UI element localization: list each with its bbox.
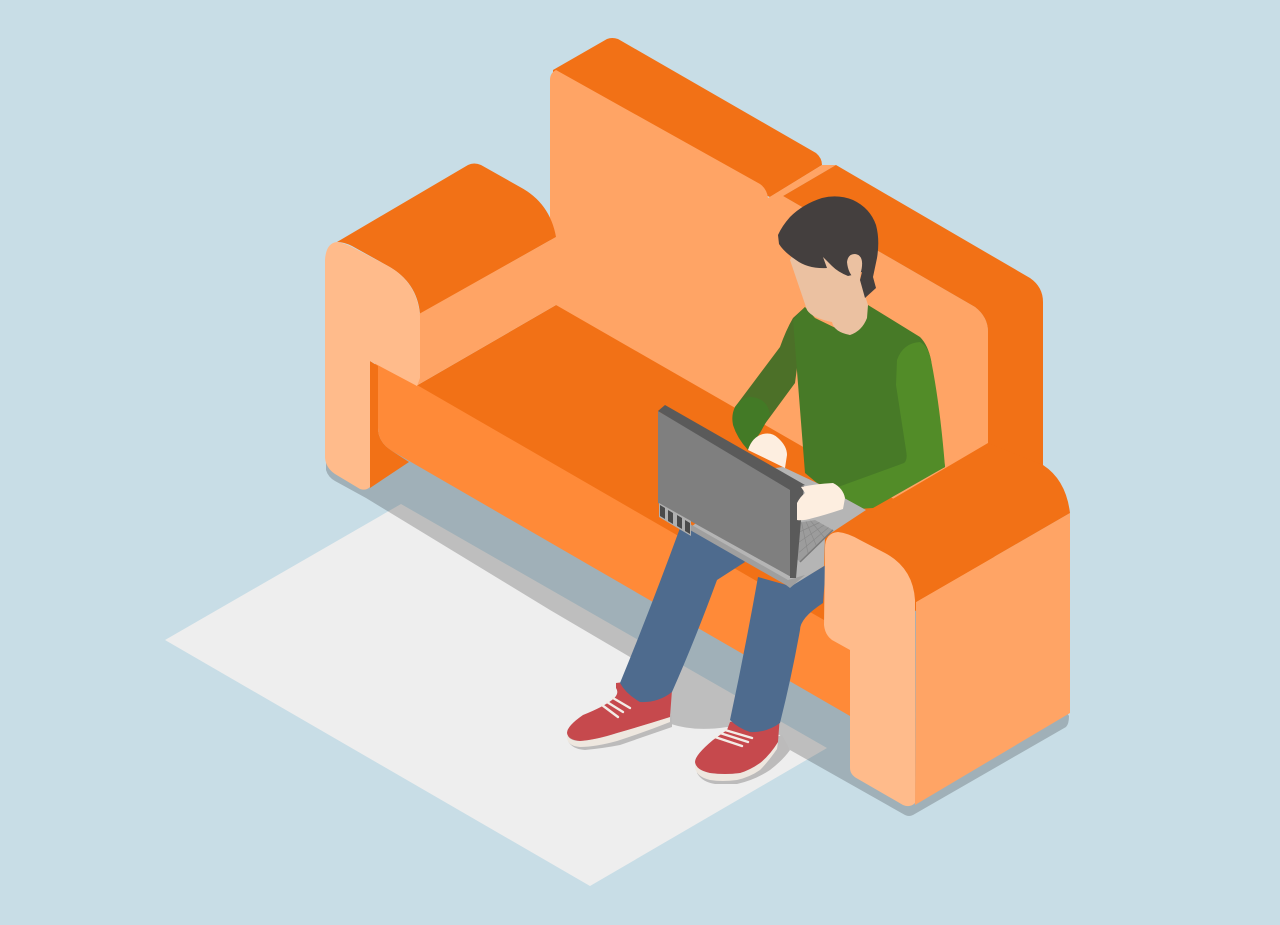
shoe shadows	[568, 715, 790, 784]
left leg	[620, 528, 745, 702]
left arm: top	[337, 164, 556, 314]
left shoe	[567, 680, 672, 747]
right arm: outer side	[915, 513, 1070, 805]
torso	[793, 305, 945, 505]
ear	[847, 254, 862, 280]
near hand	[797, 483, 845, 520]
back upper arm	[733, 307, 805, 448]
back hand	[748, 434, 787, 468]
person	[567, 196, 945, 781]
right arm: front	[824, 532, 915, 806]
rug	[165, 504, 827, 886]
laptop base	[690, 467, 866, 588]
near arm	[838, 342, 945, 510]
left arm: shaded underside	[370, 361, 409, 488]
keyboard	[795, 520, 833, 562]
right shoe	[695, 715, 780, 781]
sofa and person floor shadow	[326, 440, 1069, 816]
head	[790, 240, 868, 335]
hair	[778, 196, 878, 298]
sofa back: left top	[553, 38, 822, 197]
sofa back: front faces	[550, 70, 988, 555]
right arm	[824, 443, 1070, 806]
right arm: top	[838, 443, 1070, 602]
lid rim	[658, 405, 805, 490]
sofa back: right top	[783, 165, 1043, 480]
base edge	[690, 524, 805, 588]
left arm: front	[325, 242, 420, 490]
left arm: inner side	[416, 237, 556, 386]
lid side	[790, 486, 804, 578]
right leg	[730, 565, 826, 732]
back forearm	[732, 397, 770, 450]
sofa seat front	[375, 362, 850, 716]
laptop lid	[658, 405, 805, 578]
sofa seat top	[416, 305, 1000, 650]
vents	[659, 503, 691, 536]
